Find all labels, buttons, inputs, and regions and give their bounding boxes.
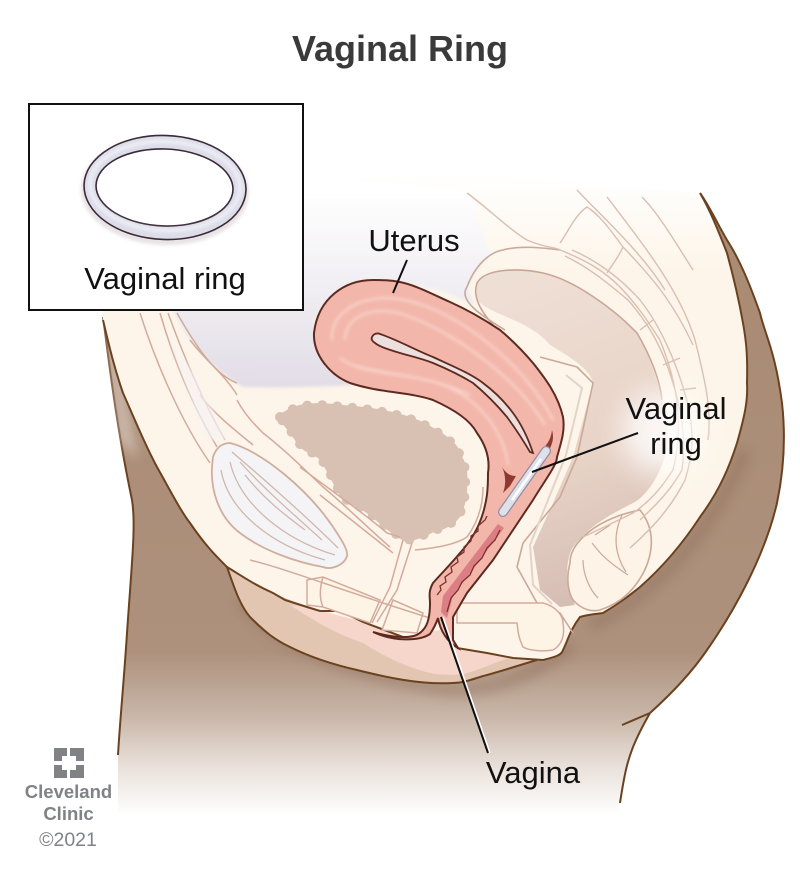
logo: Cleveland Clinic: Clinic <box>43 803 94 824</box>
label: uterus <box>368 223 460 293</box>
rectum outer wall line <box>465 247 593 633</box>
label: vaginal ring: ring <box>650 426 702 461</box>
logo: Cleveland Clinic <box>25 748 112 851</box>
rectum inner wall line <box>476 270 662 400</box>
cream edge lines <box>103 193 747 660</box>
title: Vaginal Ring <box>292 28 508 69</box>
vaginal ring in place <box>503 451 546 512</box>
anatomy illustration <box>100 175 784 830</box>
vulva pink band <box>290 605 513 675</box>
icon: vaginal ring <box>82 133 248 245</box>
abdominal muscle lines <box>140 313 390 547</box>
skin edge lines <box>103 193 784 803</box>
perineum tan band <box>227 567 560 683</box>
upper left skin fade <box>100 300 138 460</box>
label glow <box>622 390 702 474</box>
label: vagina: Vagina <box>486 755 581 790</box>
pelvic cream tissue <box>103 175 747 660</box>
lower cream pads <box>307 577 564 651</box>
label: uterus: Uterus <box>368 223 460 258</box>
label: vaginal ring: Vaginal <box>625 391 727 426</box>
vaginal canal <box>441 524 504 618</box>
lower rectum lump <box>568 510 651 611</box>
sacrum, vertebrae and back muscle lines <box>467 190 709 548</box>
label: vagina <box>441 617 581 790</box>
vaginal wall inner line <box>530 375 582 604</box>
skin shading <box>240 450 745 690</box>
uterine banding highlights <box>332 298 553 465</box>
uterus and vagina <box>314 280 564 648</box>
vaginal rugae <box>437 516 500 612</box>
bladder wall and urethra lines <box>300 467 483 623</box>
pubic bone oval <box>212 443 347 568</box>
abdominal cavity <box>170 175 490 387</box>
lump folds <box>583 515 628 598</box>
uterine cavity <box>372 333 533 453</box>
inset panel: vaginal ring <box>29 104 303 310</box>
logo: Cleveland Clinic: Cleveland <box>25 781 112 802</box>
white muscle fascia <box>170 340 228 440</box>
bladder cavity <box>280 405 465 540</box>
perineum outer line <box>227 567 537 683</box>
inset label: Vaginal ring <box>84 261 246 296</box>
logo: Cleveland Clinic: ©2021 <box>39 829 97 851</box>
pubic bone striations <box>221 452 338 560</box>
pad divider <box>250 560 430 618</box>
rectum and pouch tissue <box>465 247 668 633</box>
cervix <box>502 430 553 493</box>
label: vaginal ring <box>532 391 727 472</box>
icon: logo mark <box>54 748 84 778</box>
body silhouette <box>103 193 784 830</box>
